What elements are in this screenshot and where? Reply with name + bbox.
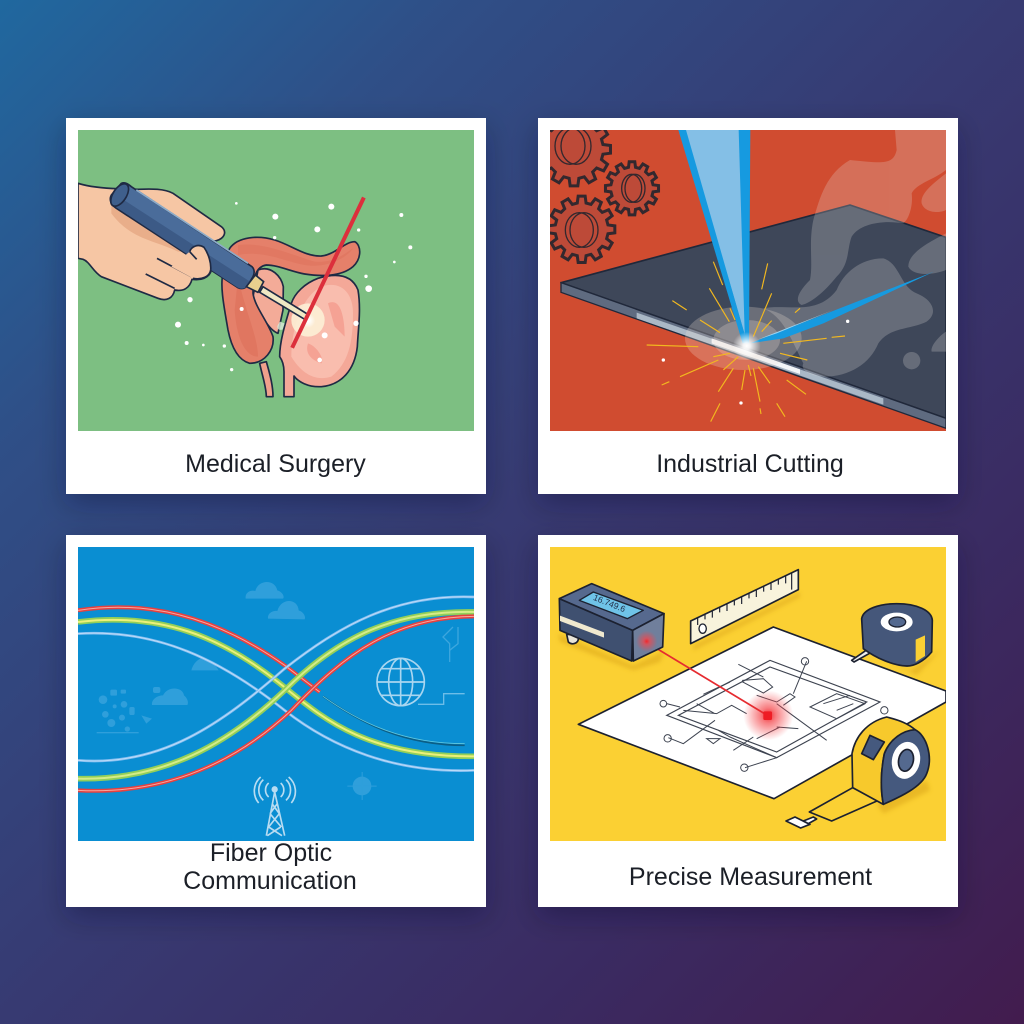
thumb [171,246,211,279]
icon: radio tower [254,777,295,836]
sparks [647,262,845,422]
icon: laser distance meter [559,584,664,661]
icon: handheld laser pen and hand [78,181,307,319]
meter readout: 16.749.6 [592,592,627,614]
label: Industrial Cutting: Industrial Cutting [656,450,844,478]
illustration: laser cutting [538,113,946,431]
smoke [763,130,946,377]
fiber cables [78,597,474,791]
icon: ruler [691,570,798,644]
metal sheet [561,205,946,418]
thin inner line [323,696,465,745]
label: Precise Measurement: Precise Measurement [629,863,872,891]
descending blue [78,633,474,771]
tip [246,275,264,292]
ascending blue [78,597,474,761]
panel: precise measurement [538,535,958,907]
descending yellow [78,620,474,756]
illustration: laser surgery [78,130,474,431]
icon: large yellow tape measure [786,717,929,828]
descending red [78,607,320,692]
icon: organ [222,237,360,397]
icon: gears [550,130,660,264]
label: Fiber Optic Communication: Communication [183,867,357,895]
background icons [97,582,377,800]
pen body [110,183,254,289]
icon: globe [377,658,465,706]
laser spot [743,690,793,740]
laser beam [293,199,363,346]
illustration: measurement tools [550,547,946,841]
panel: medical surgery [66,118,486,494]
ascending yellow [78,612,474,779]
blueprint sheet [578,627,946,799]
label: Fiber Optic Communication: Fiber Optic [210,839,332,867]
label: Fiber Optic Communication [183,839,357,895]
label: Medical Surgery: Medical Surgery [185,450,366,478]
impact glow [685,307,802,370]
panel: industrial cutting [538,113,958,494]
icon: small tape measure [852,604,932,666]
panel: fiber optic communication [66,535,486,907]
soft shadows [558,592,940,814]
laser beams [685,130,747,343]
illustration: fiber optic cables [78,547,474,841]
floor plan [660,658,888,771]
ascending red [78,616,474,791]
particles [175,202,412,371]
